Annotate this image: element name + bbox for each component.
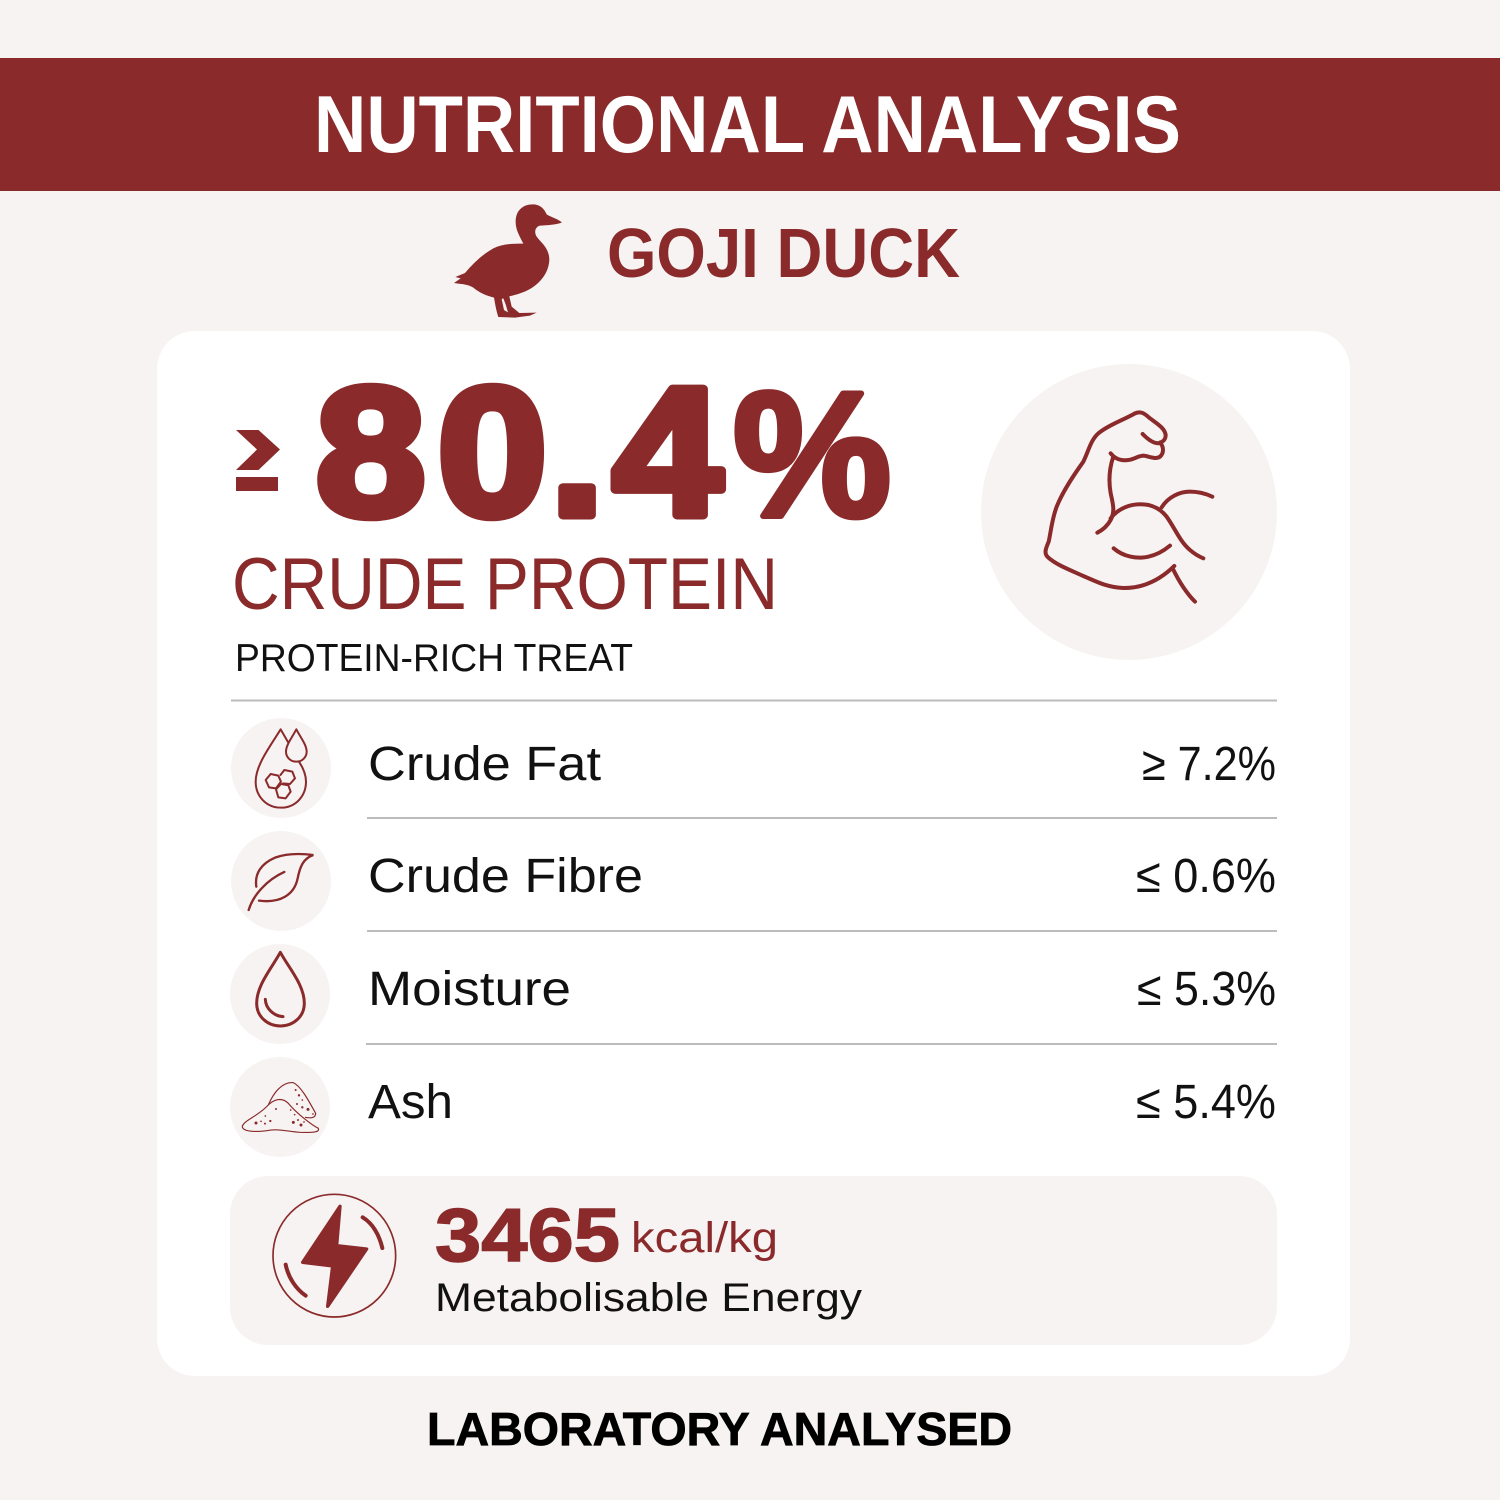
- icon: ash pile: [230, 1057, 330, 1157]
- title: NUTRITIONAL ANALYSIS: [314, 80, 1181, 170]
- row: crude fat: [231, 718, 1276, 818]
- divider: [367, 817, 1277, 819]
- row: crude fibre: [231, 831, 1276, 931]
- panel: nutrition card: [157, 331, 1350, 1376]
- title banner: [0, 58, 1500, 191]
- icon: greater-or-equal sign: [236, 430, 280, 491]
- label: crude fibre: Crude Fibre: [368, 850, 643, 903]
- label: ash: Ash: [368, 1076, 453, 1129]
- protein percentage: 80.4: [316, 351, 722, 554]
- energy unit: kcal/kg: [631, 1214, 778, 1262]
- footer note: LABORATORY ANALYSED: [427, 1403, 1012, 1455]
- divider: [231, 700, 1277, 702]
- label: moisture: Moisture: [368, 963, 571, 1016]
- value: crude fat: ≥ 7.2%: [1142, 738, 1276, 791]
- headline stat: crude protein: [232, 351, 891, 625]
- subtitle: Goji Duck: GOJI DUCK: [607, 214, 960, 292]
- row: ash: [230, 1057, 1276, 1157]
- icon: flexed arm: [981, 364, 1277, 660]
- icon: fat drops: [231, 718, 331, 818]
- energy label: Metabolisable Energy: [435, 1276, 862, 1320]
- icon: leaf: [231, 831, 331, 931]
- icon: duck: [454, 204, 562, 318]
- energy value: 3465: [435, 1193, 620, 1277]
- callout: metabolisable energy: [230, 1176, 1277, 1345]
- row: moisture: [230, 944, 1276, 1044]
- protein tagline: PROTEIN-RICH TREAT: [235, 637, 633, 680]
- icon: lightning bolt: [273, 1194, 396, 1317]
- label: crude fat: Crude Fat: [368, 738, 601, 791]
- value: moisture: ≤ 5.3%: [1137, 963, 1276, 1016]
- protein label: CRUDE PROTEIN: [232, 544, 778, 625]
- divider: [367, 930, 1277, 932]
- protein percentage: %: [733, 355, 891, 554]
- value: crude fibre: ≤ 0.6%: [1136, 850, 1276, 903]
- icon: water drop: [230, 944, 330, 1044]
- divider: [366, 1043, 1277, 1045]
- value: ash: ≤ 5.4%: [1136, 1076, 1276, 1129]
